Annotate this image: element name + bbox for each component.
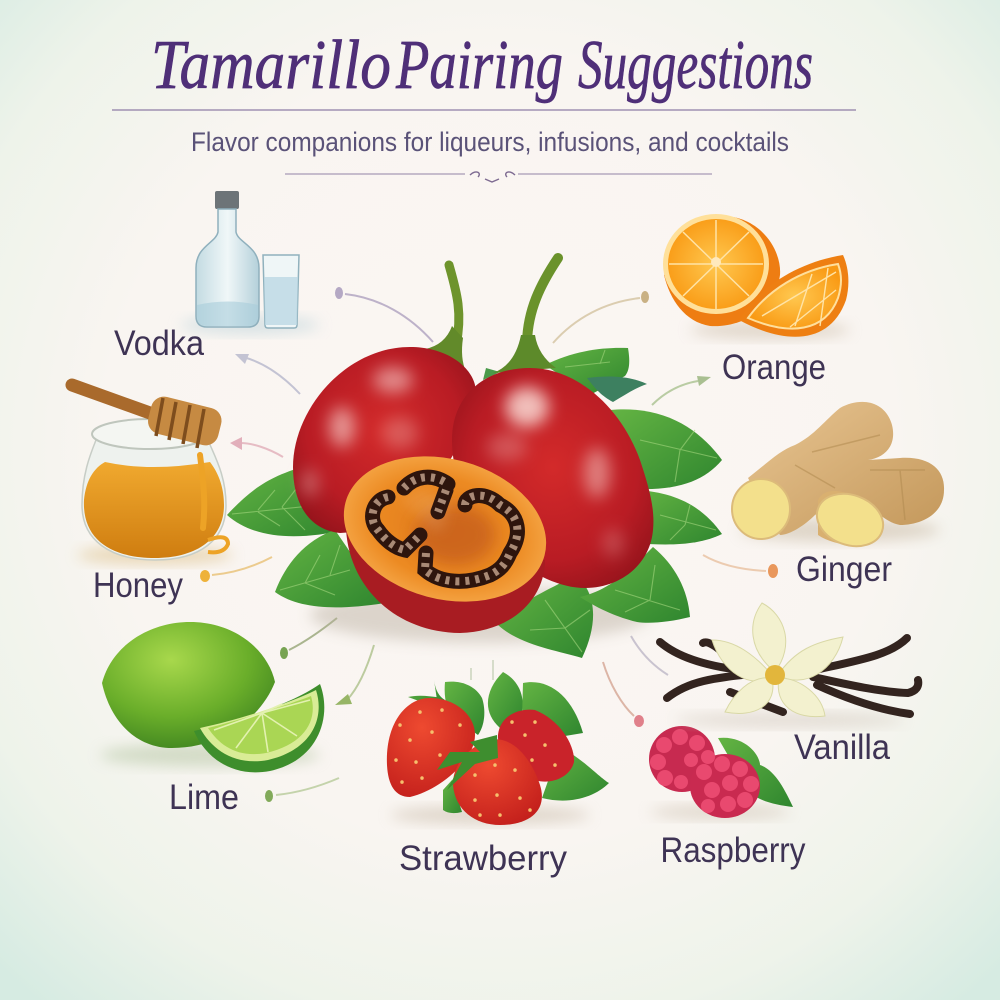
icon: vanilla	[660, 603, 918, 727]
arrow: ginger	[703, 555, 778, 578]
left tamarillo	[449, 265, 459, 345]
icon: lime	[100, 622, 324, 772]
leaf veins	[232, 350, 717, 652]
seeds light	[373, 477, 517, 581]
arrow: honey upper	[230, 437, 283, 457]
arrow: lime upper	[280, 618, 337, 659]
label: Orange: Orange	[722, 348, 826, 387]
central tamarillo group	[227, 258, 722, 658]
ornament divider	[285, 172, 712, 182]
icon: strawberries	[387, 660, 609, 825]
label: Vodka: Vodka	[114, 324, 204, 363]
arrow: raspberry	[603, 662, 644, 727]
icon: ginger	[732, 402, 944, 555]
title: Tamarillo	[151, 27, 391, 104]
arrow: vodka upper	[335, 287, 433, 342]
label: Raspberry: Raspberry	[660, 831, 806, 870]
arrow: orange lower	[652, 376, 711, 405]
icon: honey jar with dipper	[72, 385, 233, 564]
icon: orange	[663, 214, 850, 339]
icon: raspberries	[649, 726, 793, 819]
label: Vanilla: Vanilla	[794, 728, 890, 767]
label: Lime: Lime	[169, 778, 239, 817]
title: Pairing	[395, 27, 563, 104]
label: Strawberry: Strawberry	[399, 839, 567, 878]
cut tamarillo half	[346, 520, 545, 633]
leaves	[227, 348, 722, 658]
shadow	[310, 587, 650, 643]
arrow: vanilla	[631, 636, 668, 675]
arrow: orange upper	[553, 291, 649, 343]
arrow: honey lower	[200, 557, 272, 582]
label: Honey: Honey	[93, 566, 183, 605]
right tamarillo	[527, 258, 558, 342]
title	[151, 27, 813, 104]
arrow: lime middle	[335, 645, 374, 705]
seeds dark	[373, 477, 517, 581]
title divider	[112, 109, 856, 111]
icon: vodka bottle and glass	[180, 191, 320, 334]
label: Ginger: Ginger	[796, 550, 892, 589]
arrow: vodka lower	[235, 354, 300, 394]
title: Suggestions	[578, 27, 813, 104]
arrow: lime lower	[265, 778, 339, 802]
subtitle: Flavor companions for liqueurs, infusions, and cocktails	[191, 127, 789, 157]
pulp core	[415, 505, 495, 565]
